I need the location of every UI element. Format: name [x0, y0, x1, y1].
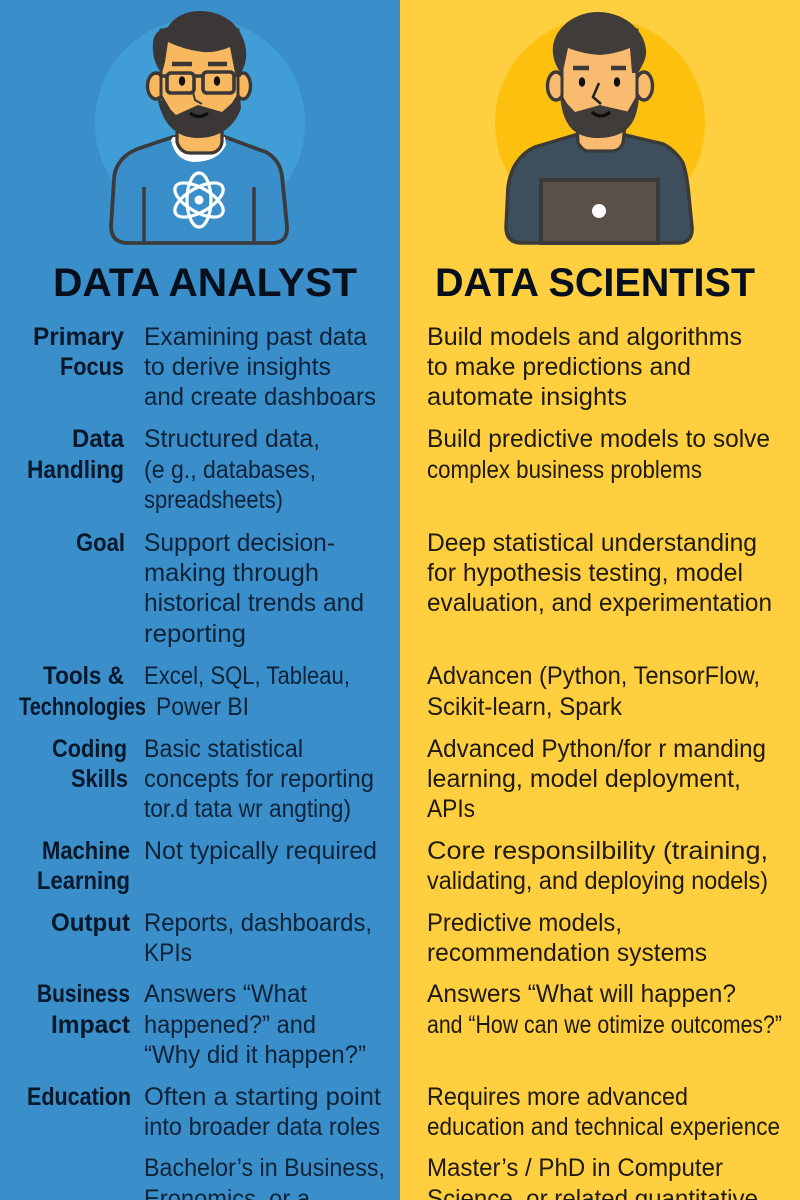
- data scientist column text: Scikit-learn, Spark: [427, 693, 622, 721]
- row labels: Tools &: [43, 662, 124, 690]
- data analyst column text: Bachelor’s in Business,: [144, 1154, 385, 1182]
- data analyst column text: to derive insights: [144, 353, 331, 381]
- data analyst column text: Support decision-: [144, 529, 335, 557]
- panel: data analyst background: [0, 0, 400, 1200]
- data scientist column text: Advanced Python/for r manding: [427, 735, 766, 763]
- data scientist column text: Answers “What will happen?: [427, 980, 736, 1008]
- data scientist column text: [427, 323, 782, 1200]
- data analyst column text: [144, 323, 385, 1200]
- data scientist column text: validating, and deploying nodels): [427, 867, 768, 895]
- data scientist column text: recommendation systems: [427, 939, 707, 967]
- data analyst column text: and create dashboars: [144, 383, 376, 411]
- data scientist column text: Advancen (Python, TensorFlow,: [427, 662, 760, 690]
- row labels: Business: [37, 980, 130, 1008]
- row labels: Goal: [76, 529, 125, 557]
- data analyst column text: historical trends and: [144, 589, 364, 617]
- icon: atom on shirt: [170, 173, 228, 227]
- data analyst column text: Often a starting point: [144, 1083, 381, 1111]
- row labels: [19, 323, 146, 1111]
- title: data analyst: DATA ANALYST: [53, 261, 357, 305]
- data analyst column text: (e g., databases,: [144, 456, 316, 484]
- row labels: Output: [51, 909, 131, 937]
- data analyst column text: into broader data roles: [144, 1113, 380, 1141]
- icon: laptop: [541, 180, 658, 243]
- data analyst column text: making through: [144, 559, 319, 587]
- data scientist column text: for hypothesis testing, model: [427, 559, 743, 587]
- data scientist column text: Build models and algorithms: [427, 323, 742, 351]
- data analyst column text: Excel, SQL, Tableau,: [144, 662, 350, 690]
- data analyst column text: Power BI: [156, 693, 249, 721]
- row labels: Impact: [51, 1011, 131, 1039]
- data analyst column text: reporting: [144, 620, 246, 648]
- icon: data analyst avatar: [95, 11, 305, 243]
- data scientist column text: Master’s / PhD in Computer: [427, 1154, 723, 1182]
- row labels: Technologies: [19, 693, 146, 721]
- data scientist column text: Core responsilbility (training,: [427, 837, 768, 865]
- data scientist column text: automate insights: [427, 383, 627, 411]
- data analyst column text: Not typically required: [144, 837, 377, 865]
- data analyst column text: Examining past data: [144, 323, 367, 351]
- data analyst column text: spreadsheets): [144, 486, 283, 514]
- row labels: Machine: [42, 837, 130, 865]
- data scientist column text: Requires more advanced: [427, 1083, 688, 1111]
- data analyst column text: Answers “What: [144, 980, 307, 1008]
- row labels: Focus: [60, 353, 124, 381]
- row labels: Learning: [37, 867, 130, 895]
- data scientist column text: learning, model deployment,: [427, 765, 741, 793]
- row labels: Coding: [52, 735, 127, 763]
- data analyst column text: Structured data,: [144, 425, 320, 453]
- data scientist column text: Deep statistical understanding: [427, 529, 757, 557]
- data analyst column text: concepts for reporting: [144, 765, 374, 793]
- data scientist column text: evaluation, and experimentation: [427, 589, 772, 617]
- row labels: Data: [72, 425, 125, 453]
- data analyst column text: happened?” and: [144, 1011, 316, 1039]
- data analyst column text: “Why did it happen?”: [144, 1041, 366, 1069]
- title: data scientist: DATA SCIENTIST: [435, 261, 755, 305]
- data scientist column text: Build predictive models to solve: [427, 425, 770, 453]
- data scientist column text: complex business problems: [427, 456, 702, 484]
- row labels: Education: [27, 1083, 131, 1111]
- data scientist column text: Predictive models,: [427, 909, 622, 937]
- data analyst column text: tor.d tata wr angting): [144, 795, 351, 823]
- panel: data scientist background: [400, 0, 800, 1200]
- row labels: Handling: [27, 456, 124, 484]
- data scientist column text: APIs: [427, 795, 475, 823]
- data analyst column text: Reports, dashboards,: [144, 909, 372, 937]
- row labels: Skills: [71, 765, 128, 793]
- row labels: Primary: [33, 323, 124, 351]
- data analyst column text: Basic statistical: [144, 735, 303, 763]
- data scientist column text: to make predictions and: [427, 353, 691, 381]
- icon: data scientist avatar: [495, 12, 705, 243]
- data analyst column text: KPIs: [144, 939, 192, 967]
